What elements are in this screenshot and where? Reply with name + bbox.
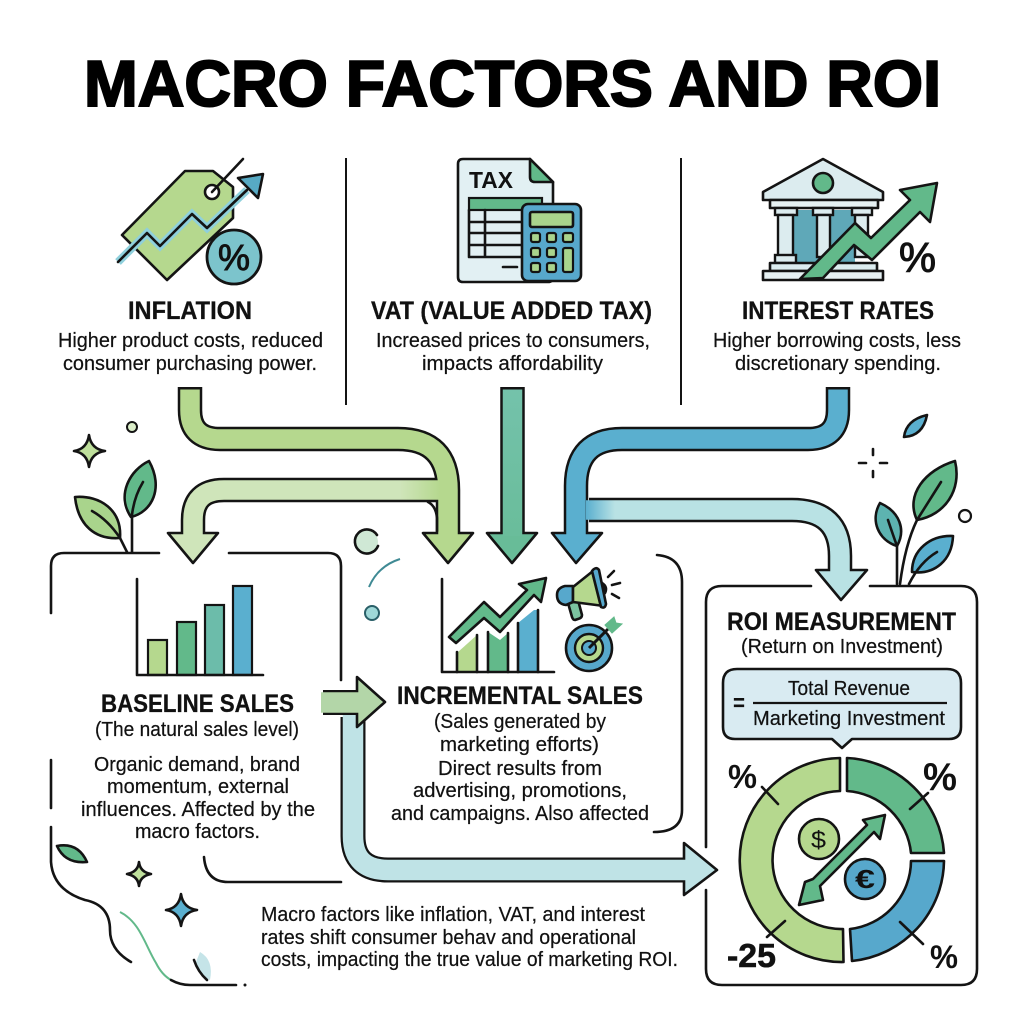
text: baseline subtitle: (The natural sales level) <box>95 718 299 741</box>
text: interest rates description <box>713 329 961 375</box>
text: baseline description: influences. Affected by the <box>81 798 315 821</box>
title: MACRO FACTORS AND ROI <box>84 47 941 120</box>
icon: bank with rising arrow: % <box>899 234 936 281</box>
sprout: right plant <box>859 415 971 584</box>
text: baseline description <box>81 753 315 843</box>
arrow: inflation to baseline sales <box>168 490 441 563</box>
text: incremental description <box>391 757 649 825</box>
text: baseline description: macro factors. <box>135 820 260 843</box>
panel: ROI measurement <box>706 586 977 985</box>
panel outline <box>706 586 977 985</box>
text: VAT description: Increased prices to consumers, <box>376 329 650 352</box>
donut chart <box>727 756 958 975</box>
icon: bank with rising arrow <box>763 159 937 281</box>
formula callout: Marketing Investment <box>753 707 945 730</box>
arrow: VAT to incremental sales <box>487 387 537 563</box>
text: incremental description: advertising, promotions, <box>413 779 627 802</box>
panel: incremental sales <box>391 555 682 832</box>
panel: baseline sales <box>51 553 341 986</box>
text: footer note <box>261 903 678 971</box>
heading: incremental sales: INCREMENTAL SALES <box>397 682 643 710</box>
text: footer note: rates shift consumer behav and operational <box>261 926 636 949</box>
donut chart: % <box>923 756 957 799</box>
text: VAT description: impacts affordability <box>422 352 604 375</box>
icon: tax document and calculator: TAX <box>469 167 514 193</box>
heading: VAT: VAT (VALUE ADDED TAX) <box>371 297 652 325</box>
donut chart: % <box>728 758 757 795</box>
icon: dollar coin <box>799 819 839 859</box>
icon: price tag with rising line <box>118 159 263 284</box>
chart: rising bars and arrow <box>442 578 554 672</box>
text: footer note: Macro factors like inflation, VAT, and interest <box>261 903 645 926</box>
text: incremental description: Direct results from <box>438 757 602 780</box>
icon: target <box>566 617 622 671</box>
text: incremental description: and campaigns. Also affected <box>391 802 649 825</box>
arrow: baseline to ROI <box>353 715 717 895</box>
text: inflation description: Higher product costs, reduced <box>58 329 323 352</box>
panel outline <box>654 555 682 832</box>
decoration: leaves and sparkles <box>57 845 211 980</box>
arrow: inflation to incremental sales <box>190 387 473 563</box>
panel: VAT <box>371 159 652 375</box>
text: incremental subtitle: (Sales generated by <box>434 710 607 733</box>
icon: tax document and calculator <box>458 159 581 282</box>
sprout: left plant <box>74 422 156 552</box>
arrow: baseline to incremental <box>321 677 385 727</box>
heading: inflation: INFLATION <box>128 297 252 325</box>
heading: ROI measurement: ROI MEASUREMENT <box>727 608 956 636</box>
icon: euro coin: € <box>855 864 875 894</box>
arrow: interest rates to ROI <box>586 510 867 600</box>
icon: euro coin <box>845 859 885 899</box>
formula callout: = <box>733 690 745 717</box>
formula callout: Total Revenue <box>788 677 910 700</box>
text: interest rates description: discretionary spending. <box>735 352 941 375</box>
text: incremental subtitle <box>434 710 607 756</box>
text: incremental subtitle: marketing efforts) <box>440 733 599 756</box>
panel outline <box>51 553 341 962</box>
arrow: two-way exchange <box>799 815 885 905</box>
text: baseline description: Organic demand, brand <box>94 753 300 776</box>
icon: price tag with rising line: % <box>218 237 250 278</box>
icon: megaphone <box>557 568 620 620</box>
arrow: interest rates to incremental sales <box>552 387 838 563</box>
icon: dollar coin: $ <box>811 827 826 854</box>
text: ROI subtitle: (Return on Investment) <box>741 635 943 658</box>
text: baseline description: momentum, external <box>107 775 289 798</box>
panel: interest rates <box>713 159 961 375</box>
text: VAT description <box>376 329 650 375</box>
heading: interest rates: INTEREST RATES <box>742 297 934 325</box>
heading: baseline sales: BASELINE SALES <box>101 690 294 718</box>
donut chart: % <box>930 939 958 975</box>
text: inflation description <box>58 329 323 375</box>
text: footer note: costs, impacting the true value of marketing ROI. <box>261 948 678 971</box>
bar chart: baseline <box>137 579 263 675</box>
text: interest rates description: Higher borrowing costs, less <box>713 329 961 352</box>
text: inflation description: consumer purchasing power. <box>63 352 317 375</box>
panel: inflation <box>58 159 323 375</box>
formula callout <box>723 669 961 748</box>
decoration: floating circles <box>354 529 400 620</box>
donut chart: -25 <box>727 937 776 974</box>
